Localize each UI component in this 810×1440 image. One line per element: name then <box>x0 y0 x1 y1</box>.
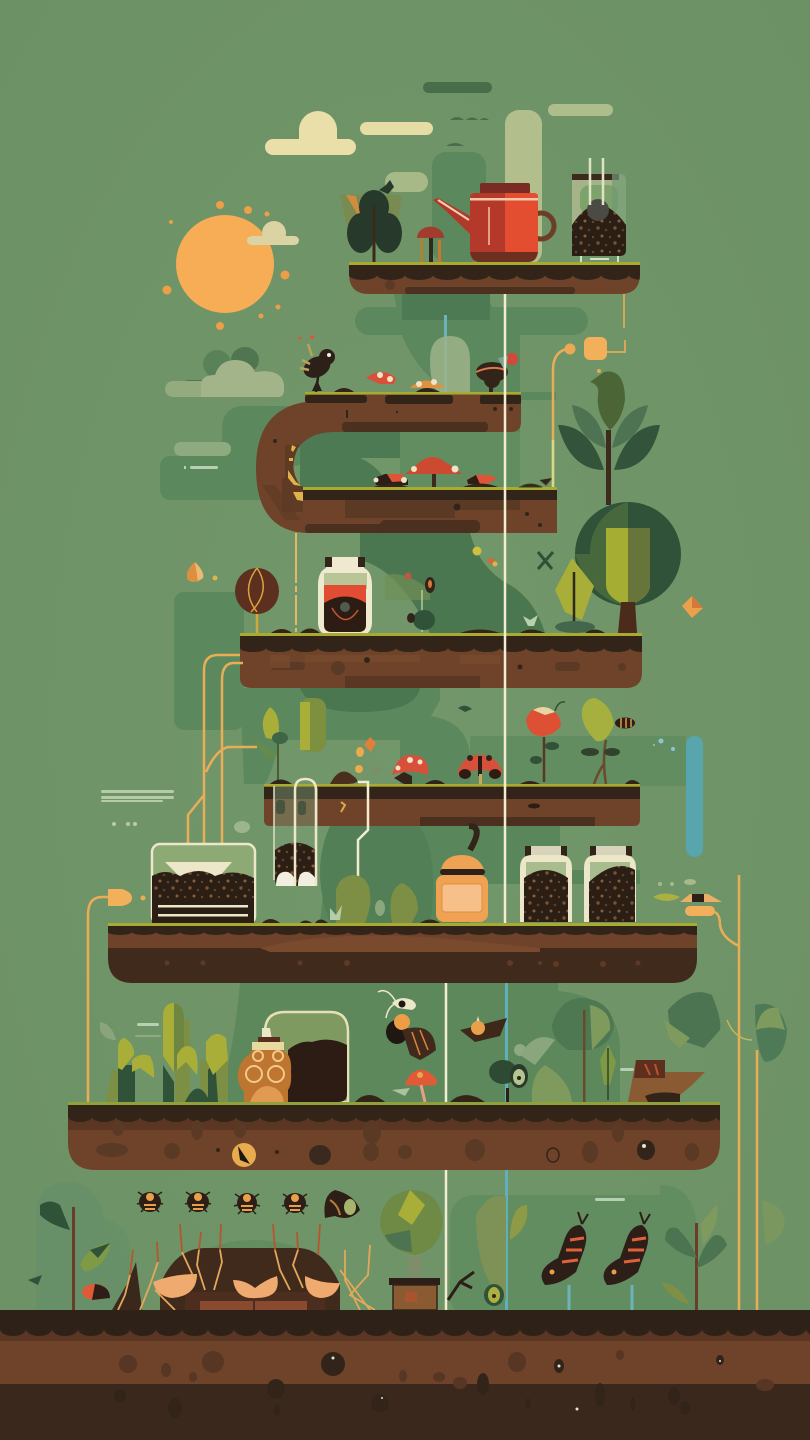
dark pill cloud <box>423 82 492 93</box>
watering can <box>433 183 554 262</box>
yellow leaf plants platform 4 <box>250 698 326 784</box>
red bugs under arch <box>374 474 498 487</box>
row of striped bugs <box>137 1192 308 1214</box>
brown boot stump <box>628 1060 705 1102</box>
cloud by sun <box>247 221 299 245</box>
flying orange wasp <box>460 1016 507 1042</box>
potted plant <box>380 1190 443 1310</box>
floating platform 5 <box>108 923 697 983</box>
cloud left layered <box>165 347 284 397</box>
cream cloud <box>265 111 356 155</box>
U-shaped soil platform <box>250 390 560 535</box>
tall pale column <box>505 110 542 265</box>
orange drip line by top platform <box>600 294 625 352</box>
corn plants <box>100 1003 228 1102</box>
millipede bugs <box>542 1212 650 1310</box>
large dark leaf right <box>664 992 720 1048</box>
seed pods right of jars <box>653 879 722 916</box>
pale marks lower <box>595 1068 634 1201</box>
soil mounds platform 4 <box>270 780 640 784</box>
top tree <box>340 180 402 262</box>
pale pill cloud <box>548 104 613 116</box>
blue water line upper <box>444 315 447 393</box>
beetle on stalk <box>298 335 335 392</box>
orange honey jar <box>436 826 488 922</box>
orange critter <box>410 379 445 392</box>
red seed left <box>82 1284 110 1300</box>
small white sprout <box>523 615 538 626</box>
right sapling <box>662 1200 785 1310</box>
small sprout by arch <box>520 478 552 487</box>
floating platform 1 <box>349 262 640 294</box>
red spotted mushroom <box>392 755 428 784</box>
blue pill column <box>686 736 703 857</box>
root arch with bulbs <box>112 1224 375 1310</box>
round tree on platform 3 <box>575 502 681 633</box>
floating platform 6 <box>68 1102 720 1170</box>
ground layers <box>0 1310 810 1440</box>
orange cable up to lamp <box>553 337 607 487</box>
floating platform 3 <box>240 633 642 688</box>
soil mounds platform 6 <box>355 1095 485 1102</box>
dark twig bug <box>448 1272 474 1300</box>
blue water lines lower <box>505 983 508 1440</box>
cream pill cloud <box>360 122 433 135</box>
small black eyes in soil <box>276 800 345 815</box>
floating platform 4 <box>264 784 640 826</box>
pale pill left <box>174 442 231 456</box>
yellow leaf sapling <box>555 558 595 633</box>
yellow leaf plant with bee <box>581 698 635 784</box>
background foliage shapes <box>36 152 697 1320</box>
blue water drops <box>653 738 675 751</box>
tree with green crown mid <box>552 998 616 1102</box>
tiny red mushroom creature <box>392 1070 437 1102</box>
pale cloud behind tree <box>385 172 428 192</box>
seed on stalk <box>235 568 279 633</box>
small line marks left <box>184 466 218 469</box>
small X mark <box>538 552 553 569</box>
test tube jar <box>274 779 318 886</box>
small red mushroom top <box>417 227 444 262</box>
orange flower right <box>682 596 703 618</box>
distant small birds <box>446 117 489 146</box>
left sapling <box>28 1202 110 1310</box>
red umbrella mushroom <box>405 457 462 487</box>
glass jar with orange coil vessel <box>238 1012 348 1102</box>
soil mounds platform 5 <box>262 919 440 923</box>
red mushroom cap small <box>366 372 396 384</box>
pale olive bushes <box>520 1037 572 1102</box>
orange pipes right <box>715 875 757 1310</box>
yellow seed and olive leaves <box>476 1195 527 1306</box>
wide glass jar with soil <box>152 844 255 924</box>
olive shrubs platform 5 <box>330 875 418 923</box>
dark sprout with bee <box>385 546 498 632</box>
large leafy tree <box>558 372 660 505</box>
ground dark pebbles <box>114 1352 724 1418</box>
orange seed left <box>187 562 218 582</box>
orange pipes left <box>188 655 257 845</box>
soil mounds platform 3 <box>271 628 605 633</box>
soil jars right <box>520 846 636 922</box>
dash line pale left <box>295 533 297 632</box>
red liquid jar <box>318 557 372 635</box>
plug and pipe left <box>88 889 146 1102</box>
dark bird with red head <box>476 353 518 392</box>
left pale dashes <box>101 790 250 833</box>
leaf on right pipe <box>727 1004 787 1062</box>
small seed cluster <box>330 737 380 784</box>
ground pebble highlights <box>332 1356 721 1410</box>
green bug on stem <box>489 1044 528 1102</box>
top jar with soil <box>572 158 626 262</box>
red and black beetle mushroom <box>457 755 503 784</box>
green shelled beetle <box>324 1190 360 1218</box>
small soil mound <box>334 388 354 392</box>
small dark bird mid <box>458 706 472 712</box>
white pipe system <box>358 294 505 1440</box>
striped hanging beetle <box>378 991 436 1060</box>
sun <box>162 201 290 330</box>
pale round shape <box>430 336 470 392</box>
red flower plant <box>526 702 565 782</box>
ground stones <box>119 1350 774 1391</box>
